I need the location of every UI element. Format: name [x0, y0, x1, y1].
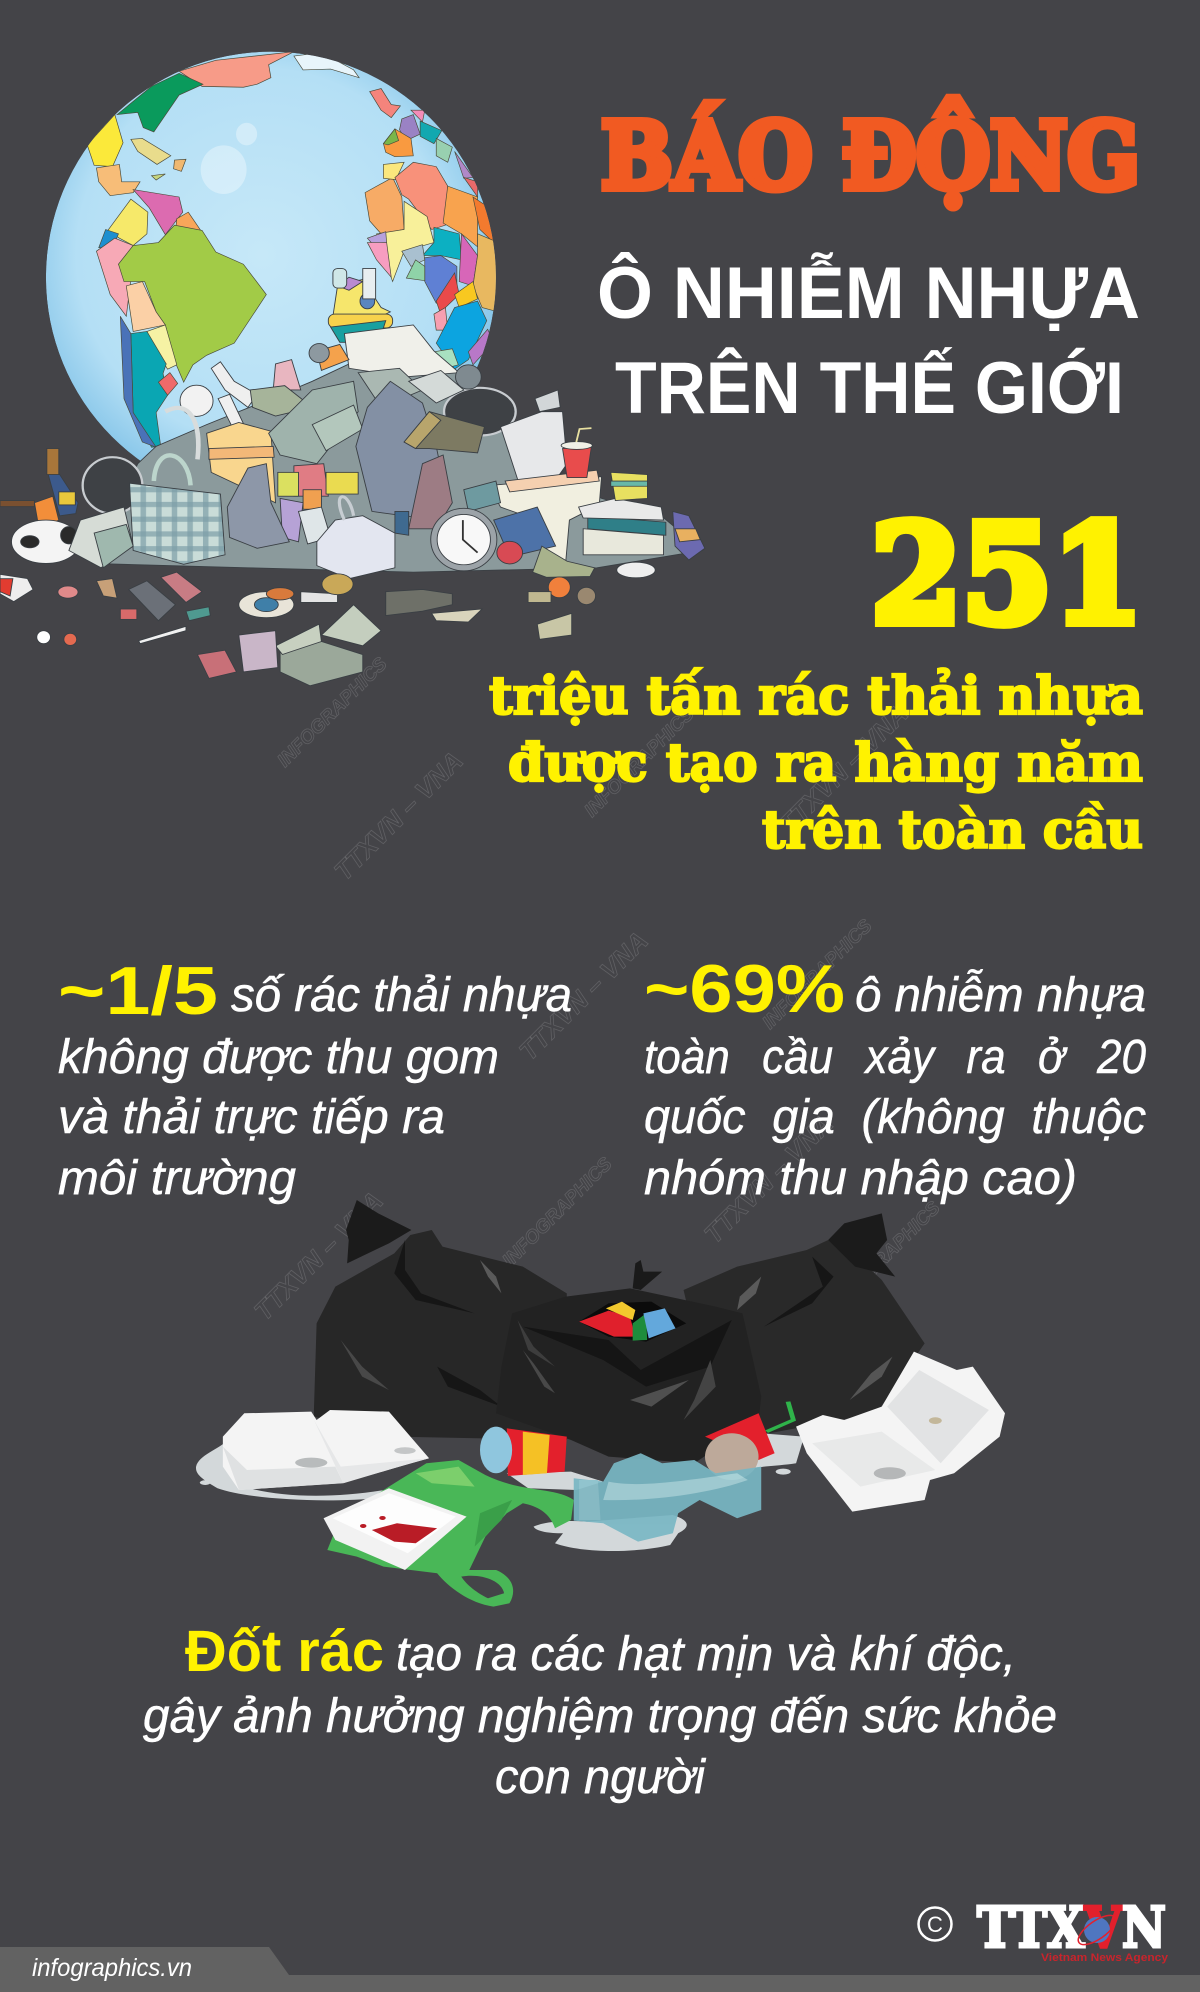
alarm clock [431, 508, 497, 571]
text block: 69% of pollution [644, 951, 1146, 1205]
watermarks: INFOGRAPHICS [274, 653, 392, 772]
text block: 69% of pollution: nhóm thu nhập cao) [644, 1152, 1077, 1205]
text block: 69% of pollution: quốc gia (không thuộc [644, 1091, 1146, 1144]
heading: Ô NHIỄM NHỰA TRÊN THẾ GIỚI: TRÊN THẾ GIỚI [615, 348, 1124, 429]
bicycle wheels [83, 457, 142, 514]
text block: 1/5 uncollected plastic waste: ~1/5 [58, 953, 218, 1029]
shoe and can [533, 546, 595, 577]
text block: 1/5 uncollected plastic waste: môi trường [58, 1152, 296, 1205]
logo: TTXVN: C [927, 1912, 943, 1937]
text block: burning waste warning: Đốt rác [185, 1619, 384, 1684]
logo: TTXVN: Vietnam News Agency [1041, 1952, 1169, 1964]
right bag [684, 1213, 925, 1433]
books [588, 516, 666, 535]
subheading: yearly plastic waste: triệu tấn rác thải nhựa [489, 666, 1143, 727]
watermarks: TTXVN – VNA [248, 1186, 389, 1326]
cardboard box [280, 642, 363, 686]
watermarks: INFOGRAPHICS [827, 1197, 945, 1316]
crates and containers [269, 381, 358, 464]
tipped plastic cup [480, 1427, 567, 1476]
watermarks: TTXVN – VNA [513, 926, 654, 1066]
text block: 1/5 uncollected plastic waste [58, 953, 572, 1205]
puddles [196, 1433, 804, 1551]
illustration: rubbish bags and plastic waste [196, 1200, 1005, 1607]
footer strip: infographics.vn [32, 1954, 192, 1982]
heading: Ô NHIỄM NHỰA TRÊN THẾ GIỚI: Ô NHIỄM NHỰA [597, 253, 1140, 334]
text block: 69% of pollution: ô nhiễm nhựa [855, 969, 1146, 1022]
watermarks: INFOGRAPHICS [759, 915, 877, 1034]
heading: Ô NHIỄM NHỰA TRÊN THẾ GIỚI [597, 253, 1140, 429]
white tray [324, 1488, 467, 1570]
text block: burning waste warning: tạo ra các hạt mịn và khí độc, [396, 1628, 1016, 1681]
small coloured packs [294, 464, 328, 496]
text block: burning waste warning [143, 1619, 1057, 1804]
left bag [314, 1200, 567, 1440]
crushed plastic bottle [574, 1453, 761, 1542]
subheading: yearly plastic waste: được tạo ra hàng năm [508, 733, 1143, 794]
orange pot [34, 496, 59, 529]
text block: 1/5 uncollected plastic waste: và thải trực tiếp ra [58, 1091, 445, 1144]
title: BÁO ĐỘNG: BÁO ĐỘNG [601, 98, 1140, 210]
headline number: 251: 251 [871, 495, 1143, 655]
illustration: globe with rubbish pile [0, 52, 705, 686]
subheading: yearly plastic waste [489, 666, 1143, 861]
soccer ball [11, 520, 80, 563]
subheading: yearly plastic waste: trên toàn cầu [762, 800, 1143, 861]
brown box [404, 412, 484, 453]
small items [464, 481, 501, 511]
toys and tools [211, 362, 257, 407]
watermarks: INFOGRAPHICS [499, 1153, 617, 1272]
text block: 69% of pollution: toàn cầu xảy ra ở 20 [644, 1031, 1146, 1084]
red cup [563, 446, 591, 478]
watermarks: TTXVN – VNA [773, 699, 914, 839]
text block: burning waste warning: con người [495, 1751, 706, 1804]
rubbish pile [0, 269, 705, 686]
watermarks: INFOGRAPHICS [581, 703, 699, 822]
left styrofoam box [223, 1410, 429, 1490]
stacked top item [333, 279, 390, 329]
bottle [48, 475, 78, 516]
watermarks: TTXVN – VNA [698, 1109, 839, 1249]
text block: 1/5 uncollected plastic waste: không được thu gom [58, 1031, 499, 1084]
plastic bottle [673, 511, 705, 560]
globe [46, 52, 498, 503]
footer strip [0, 1947, 1200, 1992]
watermarks: TTXVN – VNA [328, 746, 469, 886]
floor debris [0, 574, 33, 602]
plaid basket [129, 483, 225, 564]
text block: 69% of pollution: ~69% [644, 951, 845, 1027]
cup with straw [705, 1402, 793, 1480]
grey cloth sack [356, 381, 448, 520]
watermarks [248, 653, 945, 1326]
text block: 1/5 uncollected plastic waste: số rác thải nhựa [231, 969, 572, 1022]
logo: TTXVN: TTXVN [977, 1895, 1166, 1961]
rubbish bag with handles [317, 516, 395, 579]
striped cake [207, 422, 276, 503]
right styrofoam box [796, 1352, 1005, 1512]
centre bag [496, 1260, 761, 1463]
toilet [489, 477, 602, 572]
green plastic bag [327, 1460, 574, 1607]
grey sack [227, 464, 289, 548]
text block: burning waste warning: gây ảnh hưởng nghiệm trọng đến sức khỏe [143, 1690, 1057, 1743]
